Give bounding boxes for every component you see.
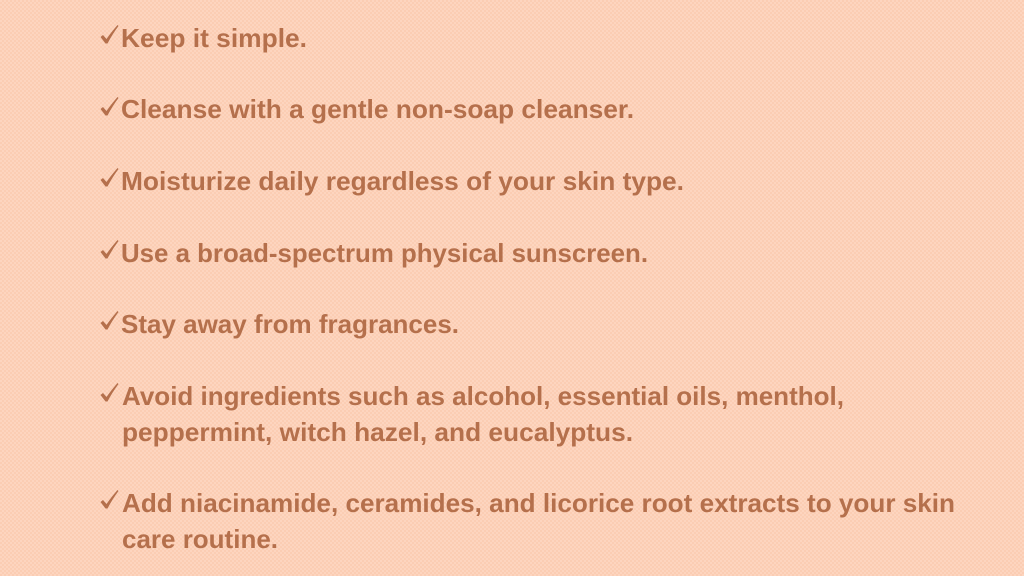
list item: moisturize: Moisturize daily regardless of your skin type. xyxy=(121,166,684,196)
icon: check mark xyxy=(100,168,118,186)
icon: check mark xyxy=(100,240,118,258)
icon: check mark xyxy=(100,97,118,116)
list item: add extracts: Add niacinamide, ceramides, and licorice root extracts to your skin xyxy=(122,488,955,518)
list item: cleanse: Cleanse with a gentle non-soap cleanser. xyxy=(121,94,634,124)
list item: sunscreen: Use a broad-spectrum physical sunscreen. xyxy=(121,238,648,268)
list item: avoid ingredients: peppermint, witch hazel, and eucalyptus. xyxy=(122,417,633,447)
list item: avoid ingredients xyxy=(100,381,844,447)
list item: add extracts xyxy=(100,488,955,554)
icon: check mark xyxy=(100,490,118,508)
list item: keep it simple: Keep it simple. xyxy=(121,23,307,53)
list item: add extracts: care routine. xyxy=(122,524,278,554)
list item: fragrances: Stay away from fragrances. xyxy=(121,309,459,339)
icon: check mark xyxy=(100,383,118,402)
list item: avoid ingredients: Avoid ingredients such as alcohol, essential oils, menthol, xyxy=(122,381,844,411)
icon: check mark xyxy=(100,311,118,330)
icon: check mark xyxy=(100,25,118,44)
